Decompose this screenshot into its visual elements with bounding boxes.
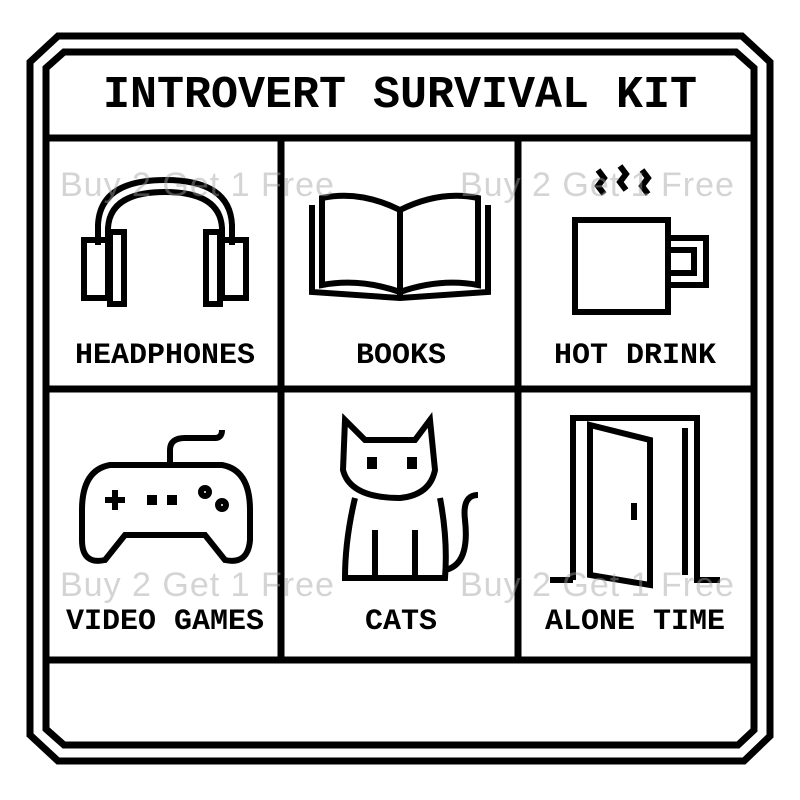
watermarks: Buy 2 Get 1 Free	[60, 166, 335, 204]
watermarks: Buy 2 Get 1 Free	[60, 566, 335, 604]
icon: book	[312, 196, 488, 298]
label: books: BOOKS	[356, 339, 446, 373]
label: hot drink: HOT DRINK	[554, 339, 716, 373]
icon: headphones	[84, 180, 246, 304]
label: alone time: ALONE TIME	[545, 605, 725, 639]
icon: hot drink	[575, 166, 706, 312]
label: headphones: HEADPHONES	[75, 339, 255, 373]
title: INTROVERT SURVIVAL KIT	[103, 70, 697, 121]
icon: game controller	[82, 430, 250, 561]
icon: door	[550, 418, 720, 585]
icon: cat	[343, 420, 478, 578]
watermarks: Buy 2 Get 1 Free	[460, 566, 735, 604]
watermarks: Buy 2 Get 1 Free	[460, 166, 735, 204]
label: cats: CATS	[365, 605, 437, 639]
label: video games: VIDEO GAMES	[66, 605, 264, 639]
